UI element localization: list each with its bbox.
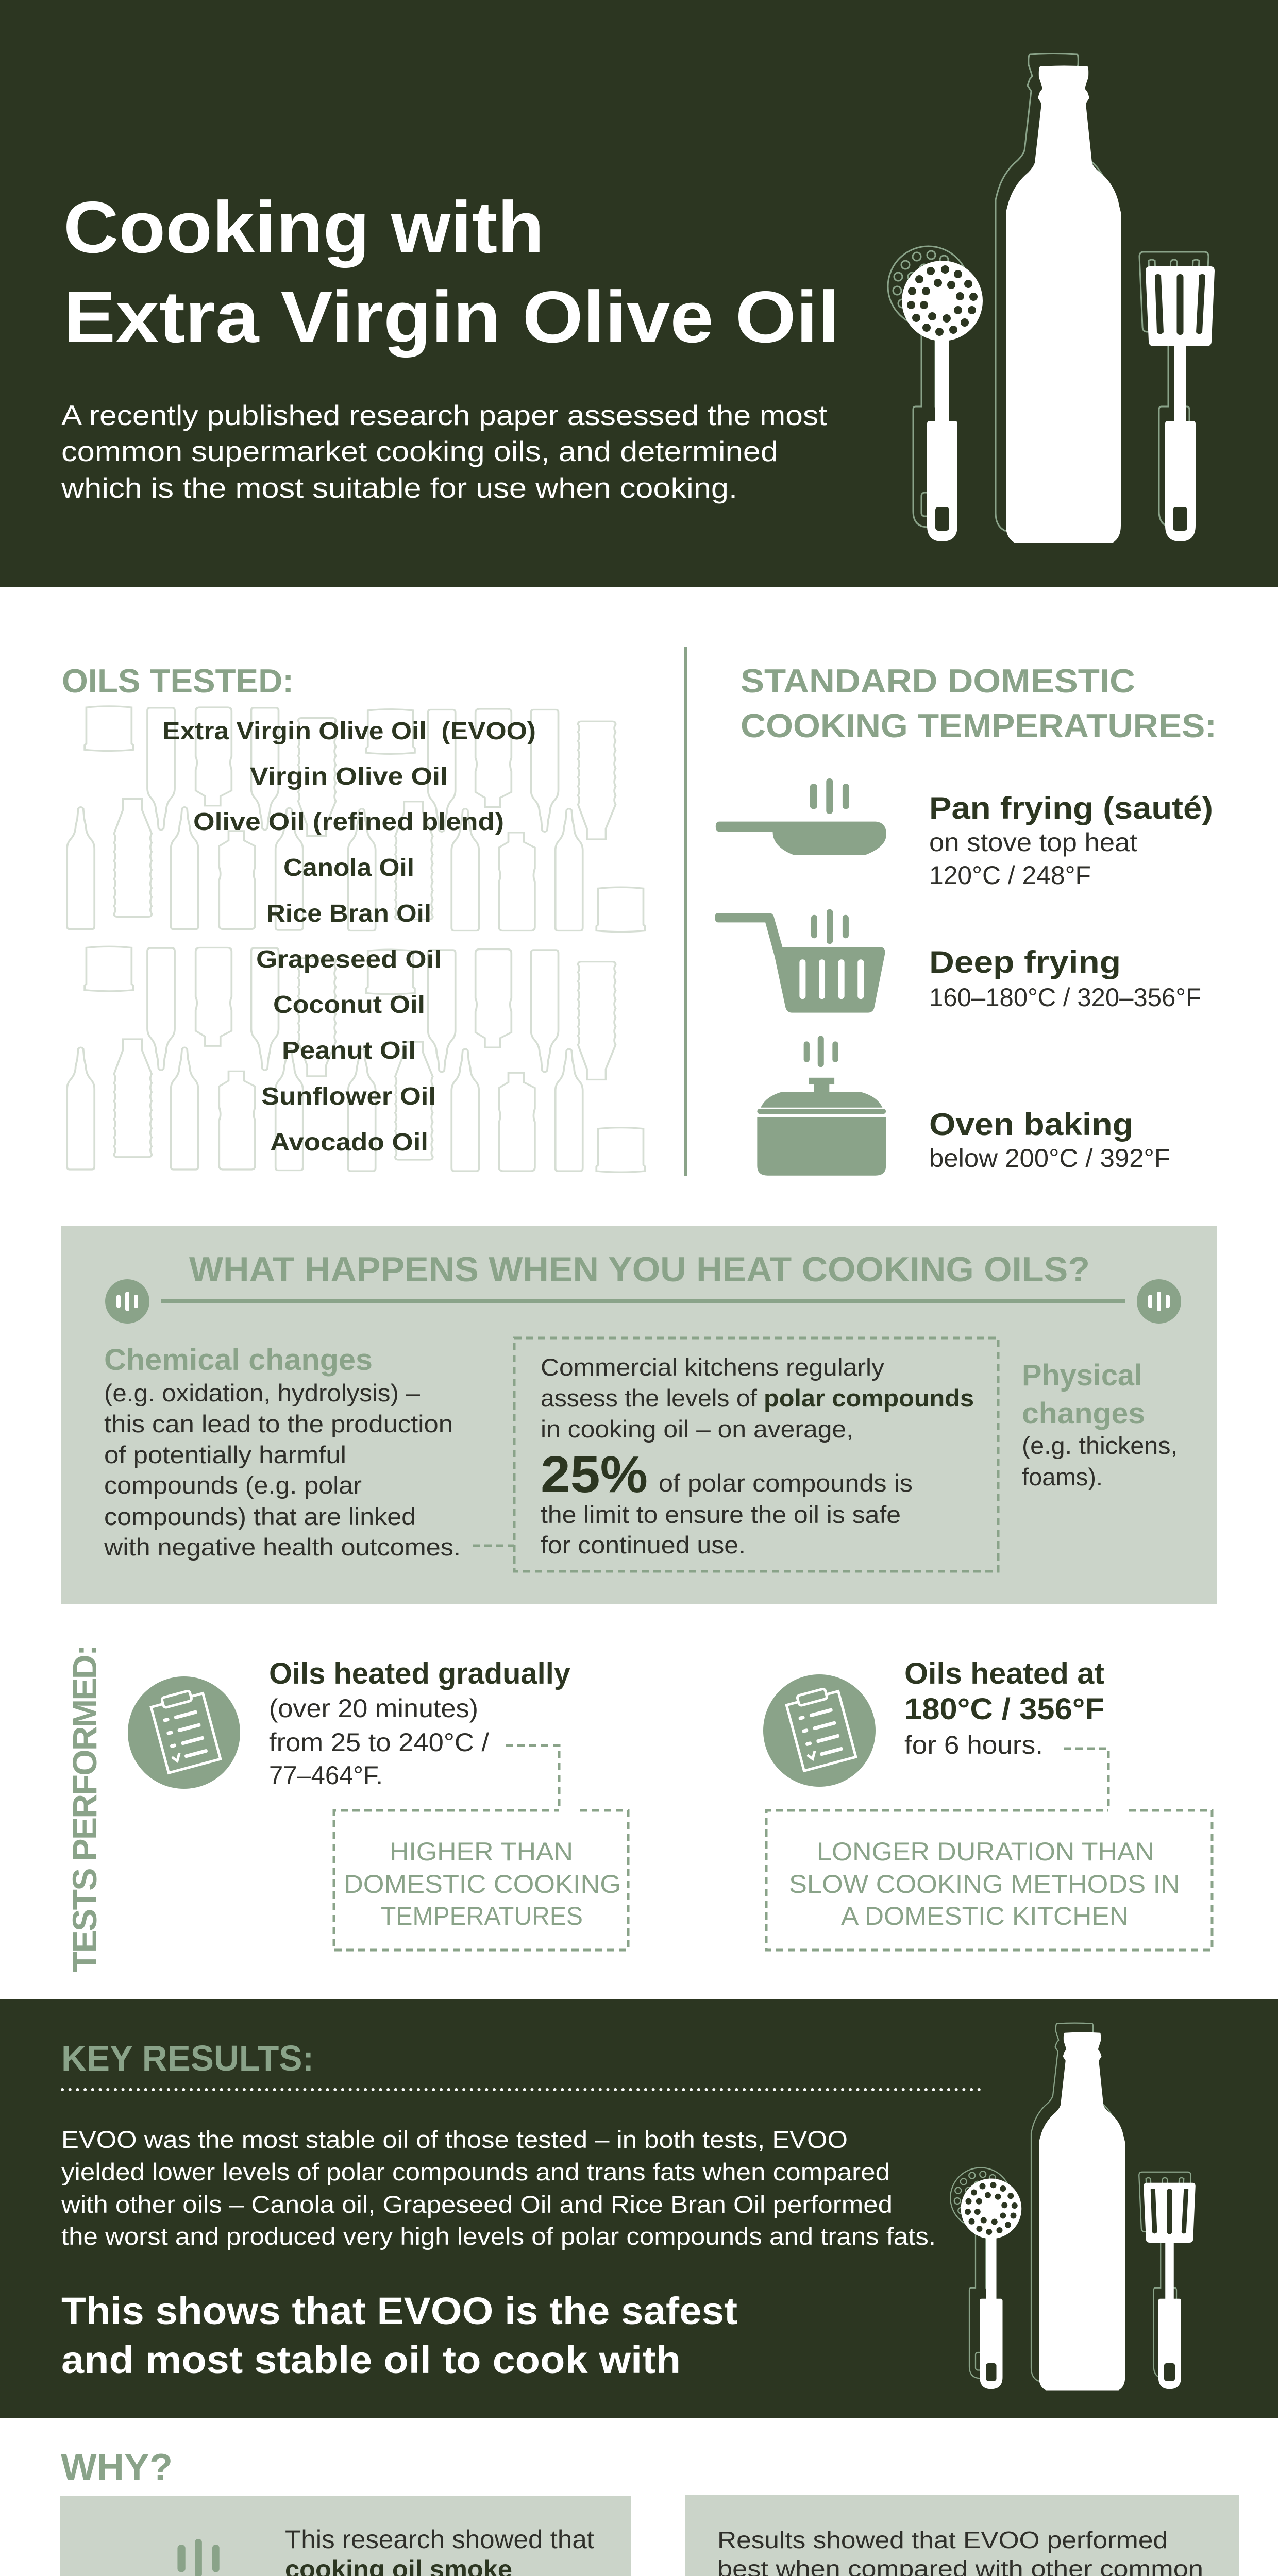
text: test 1 [269,1657,570,1790]
text: chemical changes: compounds (e.g. polar [104,1471,362,1499]
icon: oven pot [757,1036,886,1176]
panel: standard domestic cooking temperatures [715,662,1217,1176]
text: conclusion: and most stable oil to cook with [61,2338,681,2381]
text: chemical changes: this can lead to the production [104,1410,453,1437]
text: test 1: 77–464°F. [269,1761,383,1790]
text: conclusion [61,2290,737,2381]
text: key results body: with other oils – Canola oil, Grapeseed Oil and Rice Bran Oil performed [61,2191,893,2218]
text: key results body: EVOO was the most stable oil of those tested – in both tests, EVOO [61,2126,848,2153]
callout: higher than domestic: DOMESTIC COOKING [344,1870,621,1899]
text: test 2: Oils heated at [904,1657,1104,1690]
text: pan frying: Pan frying (sauté) [929,791,1213,825]
callout: dashed polar compounds box: assess the levels of [541,1384,758,1412]
heading: cooking temperatures: COOKING TEMPERATURES: [741,707,1217,744]
panel: key results background [0,1999,1278,2418]
text: test 1: from 25 to 240°C / [269,1728,489,1757]
icon: pan [77,2539,259,2576]
divider between oils and temperatures [684,647,687,1176]
icon: bottle, skimmer and spatula [888,54,1215,543]
callout: dashed polar compounds box: 25% [541,1446,648,1503]
text: physical changes: foams). [1022,1463,1103,1490]
list of oils: Virgin Olive Oil [250,763,448,790]
text: physical changes [1022,1359,1178,1490]
callout: dashed polar compounds box [473,1338,998,1571]
text: oven baking: Oven baking [929,1107,1133,1142]
title: Cooking with [63,187,544,268]
heading rule with steam icons [105,1279,1181,1324]
text: oven baking [929,1107,1170,1173]
text: key results body: yielded lower levels of polar compounds and trans fats when compared [61,2158,890,2185]
heading: cooking temperatures: STANDARD DOMESTIC [741,662,1135,700]
icon: clipboard test 2 [763,1674,876,1787]
callout: dashed polar compounds box: for continued use. [541,1531,746,1558]
list of oils: Extra Virgin Olive Oil (EVOO) [162,718,536,745]
icon: clipboard test 1 [128,1676,240,1789]
bottle outline pattern [67,706,645,1172]
intro text: which is the most suitable for use when cooking. [61,472,737,504]
text: physical changes: Physical [1022,1359,1142,1392]
heading: key results: KEY RESULTS: [61,2038,314,2078]
text: pan frying [929,791,1213,890]
callout: longer duration: LONGER DURATION THAN [817,1837,1154,1866]
list of oils: Avocado Oil [270,1129,428,1156]
list of oils: Peanut Oil [282,1037,416,1064]
text: results compared [717,2527,1203,2576]
list of oils: Grapeseed Oil [256,946,442,973]
callout: dashed polar compounds box: of polar compounds is [659,1469,913,1497]
list of oils: Olive Oil (refined blend) [193,808,504,836]
list of oils: Coconut Oil [273,991,425,1019]
heading: oils tested: OILS TESTED: [62,662,294,700]
text: test 1: Oils heated gradually [269,1657,570,1690]
intro text: common supermarket cooking oils, and determined [61,435,778,467]
icon: frying pan [716,778,886,855]
callout: dashed polar compounds box: in cooking oil – on average, [541,1415,853,1443]
text: test 1: (over 20 minutes) [269,1694,478,1723]
text: test 2: for 6 hours. [904,1731,1043,1759]
callout: higher than domestic [334,1745,628,1950]
text: key results body: the worst and produced very high levels of polar compounds and trans fats. [61,2223,936,2250]
callout: higher than domestic: HIGHER THAN [390,1837,573,1866]
heading: cooking temperatures [741,662,1217,744]
text: pan frying: 120°C / 248°F [929,861,1091,890]
icon: deep fryer basket [715,909,885,1013]
callout: higher than domestic: TEMPERATURES [381,1902,583,1930]
text: chemical changes [104,1343,461,1561]
text: deep frying: Deep frying [929,945,1121,979]
heading: what happens: WHAT HAPPENS WHEN YOU HEAT COOKING OILS? [189,1250,1090,1289]
icon: bottle, skimmer and spatula (key results) [950,2023,1196,2391]
title: Extra Virgin Olive Oil [63,276,839,358]
callout: longer duration: A DOMESTIC KITCHEN [841,1902,1129,1930]
callout: dashed polar compounds box: polar compounds [764,1384,974,1412]
callout: longer duration [766,1749,1212,1950]
panel: smoke point [60,2496,631,2576]
text: results compared: Results showed that EVOO performed [717,2527,1168,2553]
panel: results chain [685,2495,1239,2576]
text: oven baking: below 200°C / 392°F [929,1144,1170,1173]
panel: what happens when you heat cooking oils [61,1226,1217,1604]
callout: dashed polar compounds box: Commercial kitchens regularly [541,1353,885,1381]
text: physical changes: changes [1022,1397,1145,1430]
title [63,187,839,358]
panel: oils tested [62,662,645,1172]
text: chemical changes: Chemical changes [104,1343,373,1377]
heading: why: WHY? [61,2447,173,2488]
text: test 2 [904,1657,1104,1759]
text: chemical changes: compounds) that are linked [104,1503,416,1530]
text: conclusion: This shows that EVOO is the safest [61,2290,737,2332]
text: key results body [61,2126,936,2250]
text: smoke point: This research showed that [285,2525,594,2554]
text: smoke point [285,2525,598,2576]
heading: tests performed (vertical): TESTS PERFORMED: [65,1645,104,1972]
list of oils [162,718,536,1156]
text: chemical changes: (e.g. oxidation, hydrolysis) – [104,1379,421,1406]
text: chemical changes: of potentially harmful [104,1441,346,1468]
text: chemical changes: with negative health outcomes. [104,1533,461,1561]
text: deep frying: 160–180°C / 320–356°F [929,983,1201,1012]
callout: dashed polar compounds box: the limit to ensure the oil is safe [541,1501,901,1528]
callout: longer duration: SLOW COOKING METHODS IN [789,1870,1180,1899]
intro text [61,399,827,504]
text: deep frying [929,945,1201,1012]
intro text: A recently published research paper assessed the most [61,399,827,431]
text: test 2: 180°C / 356°F [904,1692,1104,1726]
text: pan frying: on stove top heat [929,828,1137,857]
list of oils: Sunflower Oil [261,1083,436,1110]
list of oils: Rice Bran Oil [266,900,431,927]
text: physical changes: (e.g. thickens, [1022,1432,1178,1459]
list of oils: Canola Oil [283,854,414,882]
panel: header background [0,0,1278,587]
